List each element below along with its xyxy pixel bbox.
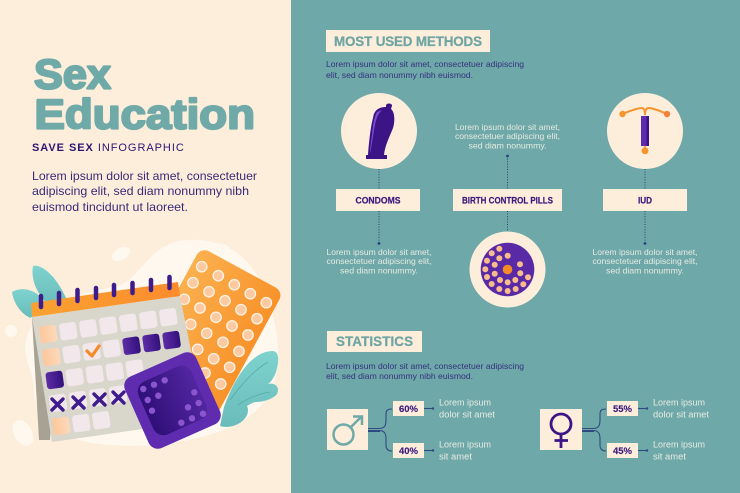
condoms text: Lorem ipsum dolor sit amet, xyxy=(326,248,432,257)
subtitle: SAVE SEX INFOGRAPHIC xyxy=(32,142,185,154)
illustration: calendar, pill pack and wrapper xyxy=(5,240,284,452)
stat: 60%: 60% xyxy=(399,404,418,415)
stat: 45%: 45% xyxy=(613,446,632,457)
label: birth control pills xyxy=(453,189,562,211)
stat labels: dolor sit amet xyxy=(653,410,709,420)
iud text: Lorem ipsum dolor sit amet, xyxy=(592,248,698,257)
iud text: sed diam nonummy. xyxy=(606,266,684,276)
calendar rings xyxy=(41,277,170,307)
stat labels: dolor sit amet xyxy=(439,410,495,420)
section heading: statistics: STATISTICS xyxy=(336,334,413,349)
background: right panel xyxy=(291,0,740,493)
female statistics xyxy=(540,398,709,462)
birth control text: sed diam nonummy. xyxy=(468,142,546,150)
iud text xyxy=(592,248,698,276)
stat labels: sit amet xyxy=(439,452,472,462)
birth control text: consectetuer adipiscing elit, xyxy=(455,132,560,141)
section heading: most used methods xyxy=(326,30,490,52)
stat: 40%: 40% xyxy=(399,446,418,457)
intro text: adipiscing elit, sed diam nonummy nibh xyxy=(32,185,249,198)
birth control text xyxy=(455,123,560,150)
birth control text: Lorem ipsum dolor sit amet, xyxy=(455,123,560,132)
label: birth control pills: BIRTH CONTROL PILLS xyxy=(462,195,553,205)
label: condoms: CONDOMS xyxy=(356,195,400,205)
label: iud xyxy=(603,189,687,211)
section heading: statistics xyxy=(327,331,422,352)
background: left panel xyxy=(0,0,291,493)
leaf veins xyxy=(230,362,270,405)
section heading: most used methods: MOST USED METHODS xyxy=(334,34,482,49)
method: birth control pills icon xyxy=(470,232,546,308)
statistics description: elit, sed diam nonummy nibh euismod. xyxy=(326,372,473,381)
intro text xyxy=(32,170,257,214)
title: Education xyxy=(34,90,255,138)
stat labels: sit amet xyxy=(653,452,686,462)
pill blister pack xyxy=(128,247,284,425)
checkmark xyxy=(87,346,99,356)
stat labels xyxy=(439,398,495,462)
stat: 60% xyxy=(393,401,434,416)
title: Sex xyxy=(34,50,112,98)
method: iud icon xyxy=(607,93,683,169)
title xyxy=(34,50,255,138)
statistics description: Lorem ipsum dolor sit amet, consectetuer adipiscing xyxy=(326,362,524,371)
connector tree xyxy=(368,409,392,451)
condoms text xyxy=(326,248,432,276)
statistics description xyxy=(326,362,524,381)
iud text: consectetuer adipiscing elit, xyxy=(592,257,698,266)
intro text: euismod tincidunt ut laoreet. xyxy=(32,201,188,214)
stat labels: Lorem ipsum xyxy=(439,440,491,450)
stat labels xyxy=(653,398,709,462)
intro text: Lorem ipsum dolor sit amet, consectetuer xyxy=(32,170,257,183)
icon: male symbol xyxy=(327,409,368,450)
condom wrapper xyxy=(121,349,224,452)
stat: 55%: 55% xyxy=(613,404,632,415)
calendar xyxy=(31,277,205,442)
stat labels: Lorem ipsum xyxy=(653,398,705,408)
leaves behind calendar xyxy=(12,266,278,427)
method: condoms icon xyxy=(341,93,417,169)
methods description: elit, sed diam nonummy nibh euismod. xyxy=(326,71,473,80)
icon: female symbol xyxy=(540,409,582,450)
methods description xyxy=(326,60,524,80)
stat: 40% xyxy=(393,443,434,458)
connector tree xyxy=(582,409,606,451)
condoms text: sed diam nonummy. xyxy=(340,266,418,276)
male statistics xyxy=(327,398,495,462)
label: iud: IUD xyxy=(638,195,652,205)
condoms text: consectetuer adipiscing elit, xyxy=(326,257,432,266)
methods description: Lorem ipsum dolor sit amet, consectetuer adipiscing xyxy=(326,60,524,69)
label: condoms xyxy=(336,189,420,211)
stat labels: Lorem ipsum xyxy=(439,398,491,408)
stat labels: Lorem ipsum xyxy=(653,440,705,450)
stat: 55% xyxy=(607,401,648,416)
connector lines xyxy=(378,155,646,245)
stat: 45% xyxy=(607,443,648,458)
calendar day cells xyxy=(39,308,191,435)
crossed-out days xyxy=(52,392,124,410)
blob background xyxy=(25,240,278,446)
